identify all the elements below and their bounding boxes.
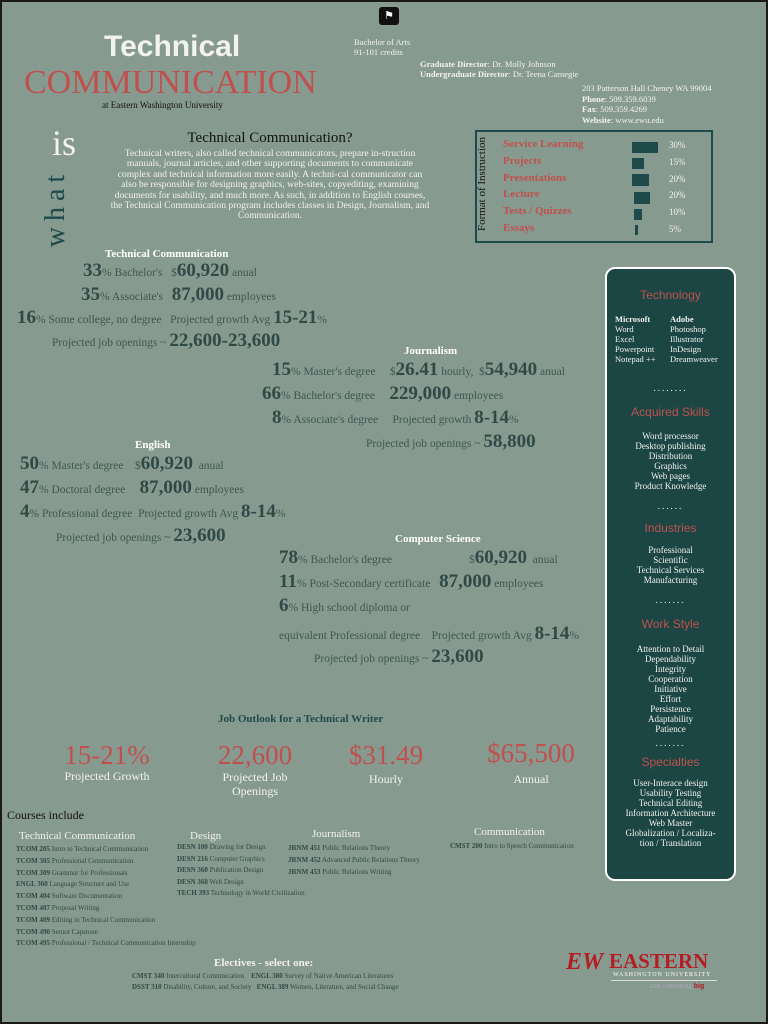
panel: skills sidebar: InDesign [670,344,701,354]
courses: communication [450,826,574,850]
panel: skills sidebar: Adobe [670,314,694,324]
job outlook stats: 15-21% [64,740,150,770]
courses: design: Design [190,830,221,842]
stats: english: 47% Doctoral degree 87,000 employees [20,477,244,498]
panel: skills sidebar: Persistence [650,704,691,714]
job outlook stats: Openings [232,784,278,798]
directors: Undergraduate Director: Dr. Teena Carnegie [420,69,578,79]
panel: skills sidebar: Integrity [655,664,686,674]
title: Technical [104,30,240,63]
chart: format of instruction: Service Learning [503,138,583,150]
job outlook stats: $65,500 [487,738,575,768]
what is heading: what [40,169,71,247]
title: at Eastern Washington University [102,100,223,110]
what is text: Technical Communication? [187,130,353,146]
courses: technical communication: TCOM 495 Professional / Technical Communication Internship [16,939,196,947]
stats: english: 50% Master's degree $60,920 anual [20,453,224,474]
panel: skills sidebar: Dependability [645,654,696,664]
chart: format of instruction: Essays [503,222,534,234]
electives: Electives - select one: [214,957,313,969]
stats: journalism: Projected job openings ~ 58,800 [366,431,536,452]
logo: eastern washington university: start something big [649,982,704,990]
logo: eastern washington university: EW [566,949,603,975]
panel: skills sidebar: ....... [656,738,685,748]
title [24,30,317,110]
courses: design: DESN 368 Web Design [177,878,244,886]
what is heading [40,123,76,248]
courses: journalism [288,828,420,876]
panel: skills sidebar: Scientific [653,555,688,565]
chart: format of instruction: Presentations [503,172,566,184]
stats: computer science [279,533,579,667]
stats: computer science: 78% Bachelor's degree [279,547,392,568]
panel: skills sidebar: Microsoft [615,314,650,324]
degree info [354,37,410,57]
courses: design: TECH 393 Technology in World Civilization [177,889,305,897]
panel: skills sidebar: Photoshop [670,324,706,334]
courses heading: Courses include [7,808,84,822]
panel: skills sidebar: Illustrator [670,334,704,344]
contact: Website: www.ewu.edu [582,114,664,124]
chart: format of instruction: Tests / Quizzes [503,205,572,217]
courses: design [177,830,305,897]
panel: skills sidebar: ........ [654,383,688,393]
electives [132,957,399,991]
chart: format of instruction: 20% [669,174,686,184]
courses: technical communication: TCOM 409 Editing in Technical Communication [16,916,155,924]
panel: skills sidebar: Word [615,324,634,334]
contact: Phone: 509.359.6039 [582,94,656,104]
chart: format of instruction: 30% [669,140,686,150]
stats: technical communication: 35% Associate's 87,000 employees [81,284,276,305]
courses: technical communication: TCOM 305 Professional Communication [16,857,133,865]
chart: format of instruction: 10% [669,207,686,217]
job outlook stats: Annual [513,772,549,786]
industries: Industries [644,521,697,535]
logo: eastern washington university: WASHINGTON UNIVERSITY [613,972,711,978]
what is text: Technical writers, also called technical communicators, prepare in-struction manuals, journal articles, and other supporting documents to communicate complex and technical information more easily. A techni-cal communicator can also be responsible for designing graphics, web-sites, copyediting, examining documents for usability, and much more. As such, in addition to English courses, the Technical Communication program includes classes in Design, Journalism, and Communication. [111,148,429,221]
courses: technical communication: TCOM 407 Proposal Writing [16,904,99,912]
panel: skills sidebar: Web Master [649,818,692,828]
what is heading: is [52,123,76,163]
contact [582,83,712,124]
chart: format of instruction: Format of Instruction [476,137,488,231]
panel: skills sidebar: Effort [660,694,681,704]
logo: eastern washington university: EASTERN [609,949,708,973]
courses: technical communication: TCOM 404 Software Documentation [16,892,122,900]
stats: technical communication: 33% Bachelor's $60,920 anual [83,260,257,281]
job outlook stats [64,738,575,798]
specialties: Specialties [641,755,700,769]
courses: technical communication: TCOM 309 Grammar for Professionals [16,869,128,877]
courses: technical communication [16,830,196,947]
panel: skills sidebar: User-Interace design [633,778,708,788]
job outlook heading: Job Outlook for a Technical Writer [218,713,383,725]
work style: Work Style [642,617,699,631]
chart: format of instruction [475,130,713,243]
stats: journalism [262,345,565,452]
panel: skills sidebar: Initiative [654,684,687,694]
panel: skills sidebar: Attention to Detail [637,644,704,654]
job outlook stats: Hourly [369,772,403,786]
courses: design: DESN 216 Computer Graphics [177,854,265,862]
job outlook stats: $31.49 [349,740,423,770]
panel: skills sidebar [605,267,736,881]
directors: Graduate Director: Dr. Molly Johnson [420,59,556,69]
panel: skills sidebar: Information Architecture [626,808,715,818]
icon: graduation cap: ⚑ [384,10,394,22]
stats: english [20,439,285,546]
panel: skills sidebar: ....... [656,595,685,605]
courses: technical communication: TCOM 205 Intro to Technical Communication [16,845,148,853]
chart: format of instruction: 20% [669,190,686,200]
stats: computer science: Projected job openings ~ 23,600 [314,646,484,667]
stats: english: Projected job openings ~ 23,600 [56,525,226,546]
stats: technical communication: Projected job openings ~ 22,600-23,600 [52,330,280,351]
degree info: 91-101 credits [354,47,403,57]
panel: skills sidebar: Product Knowledge [635,481,706,491]
panel: skills sidebar: Graphics [654,461,687,471]
panel: skills sidebar: tion / Translation [640,838,701,848]
stats: computer science: equivalent Professional degree Projected growth Avg 8-14% [279,623,579,644]
panel: skills sidebar: Word processor [642,431,699,441]
stats: computer science: Computer Science [395,533,481,545]
stats: english: 4% Professional degree Projected growth Avg 8-14% [20,501,285,522]
stats: technical communication [17,248,327,351]
panel: skills sidebar: Usability Testing [640,788,701,798]
chart: format of instruction: 15% [669,157,686,167]
chart: format of instruction: 5% [669,224,681,234]
stats: journalism: 15% Master's degree $26.41 hourly, $54,940 anual [272,359,565,380]
stats: journalism: 66% Bachelor's degree 229,000 employees [262,383,503,404]
panel: skills sidebar: ...... [658,501,683,511]
technology: Technology [640,288,701,302]
panel: skills sidebar: Adaptability [648,714,693,724]
stats: english: English [135,439,170,451]
courses: communication: Communication [474,826,545,838]
logo: eastern washington university [566,949,717,990]
stats: journalism: 8% Associate's degree Projected growth 8-14% [272,407,519,428]
courses: technical communication: Technical Communication [19,830,135,842]
courses: design: DESN 100 Drawing for Design [177,843,266,851]
icon: graduation cap [379,7,399,25]
stats: computer science: $60,920 anual [469,547,558,568]
title: COMMUNICATION [24,64,317,101]
courses: design: DESN 360 Publication Design [177,866,263,874]
panel: skills sidebar: Web pages [651,471,690,481]
degree info: Bachelor of Arts [354,37,410,47]
courses: journalism: Journalism [312,828,360,840]
contact: 203 Patterson Hall Cheney WA 99004 [582,83,711,93]
chart: format of instruction: Projects [503,155,541,167]
stats: journalism: Journalism [404,345,457,357]
electives: CMST 340 Intercultural Commnication ENGL 380 Survey of Native American Literatures [132,972,393,980]
stats: technical communication: Technical Communication [105,248,228,260]
panel: skills sidebar: Desktop publishing [635,441,706,451]
panel: skills sidebar: Distribution [649,451,692,461]
panel: skills sidebar: Manufacturing [644,575,697,585]
courses: technical communication: ENGL 360 Language Structure and Use [16,880,129,888]
panel: skills sidebar: Globalization / Localiza- [626,828,715,838]
electives: DSST 310 Disability, Culture, and Society ENGL 389 Women, Literature, and Social Change [132,983,399,991]
panel: skills sidebar: Patience [655,724,686,734]
directors [420,59,578,79]
panel: skills sidebar: Powerpoint [615,344,654,354]
courses: journalism: JRNM 453 Public Relations Writing [288,868,391,876]
panel: skills sidebar: Technical Services [637,565,704,575]
panel: skills sidebar: Dreamweaver [670,354,718,364]
panel: skills sidebar: Notepad ++ [615,354,656,364]
job outlook stats: Projected Job [222,770,288,784]
courses: communication: CMST 200 Intro to Speech Communication [450,842,574,850]
job outlook stats: Projected Growth [64,769,149,783]
stats: technical communication: 16% Some college, no degree Projected growth Avg 15-21% [17,307,327,328]
contact: Fax: 509.359.4269 [582,104,647,114]
chart: format of instruction: Lecture [503,188,539,200]
panel: skills sidebar: Technical Editing [639,798,702,808]
panel: skills sidebar: Professional [648,545,693,555]
acquired skills: Acquired Skills [631,405,710,419]
job outlook stats: 22,600 [218,740,292,770]
courses: journalism: JRNM 451 Public Relations Theory [288,844,390,852]
courses: journalism: JRNM 452 Advanced Public Relations Theory [288,856,420,864]
courses: technical communication: TCOM 490 Senior Capstone [16,928,98,936]
stats: computer science: 11% Post-Secondary certificate 87,000 employees [279,571,543,592]
panel: skills sidebar: Cooperation [648,674,693,684]
stats: computer science: 6% High school diploma or [279,595,410,616]
panel: skills sidebar: Excel [615,334,634,344]
